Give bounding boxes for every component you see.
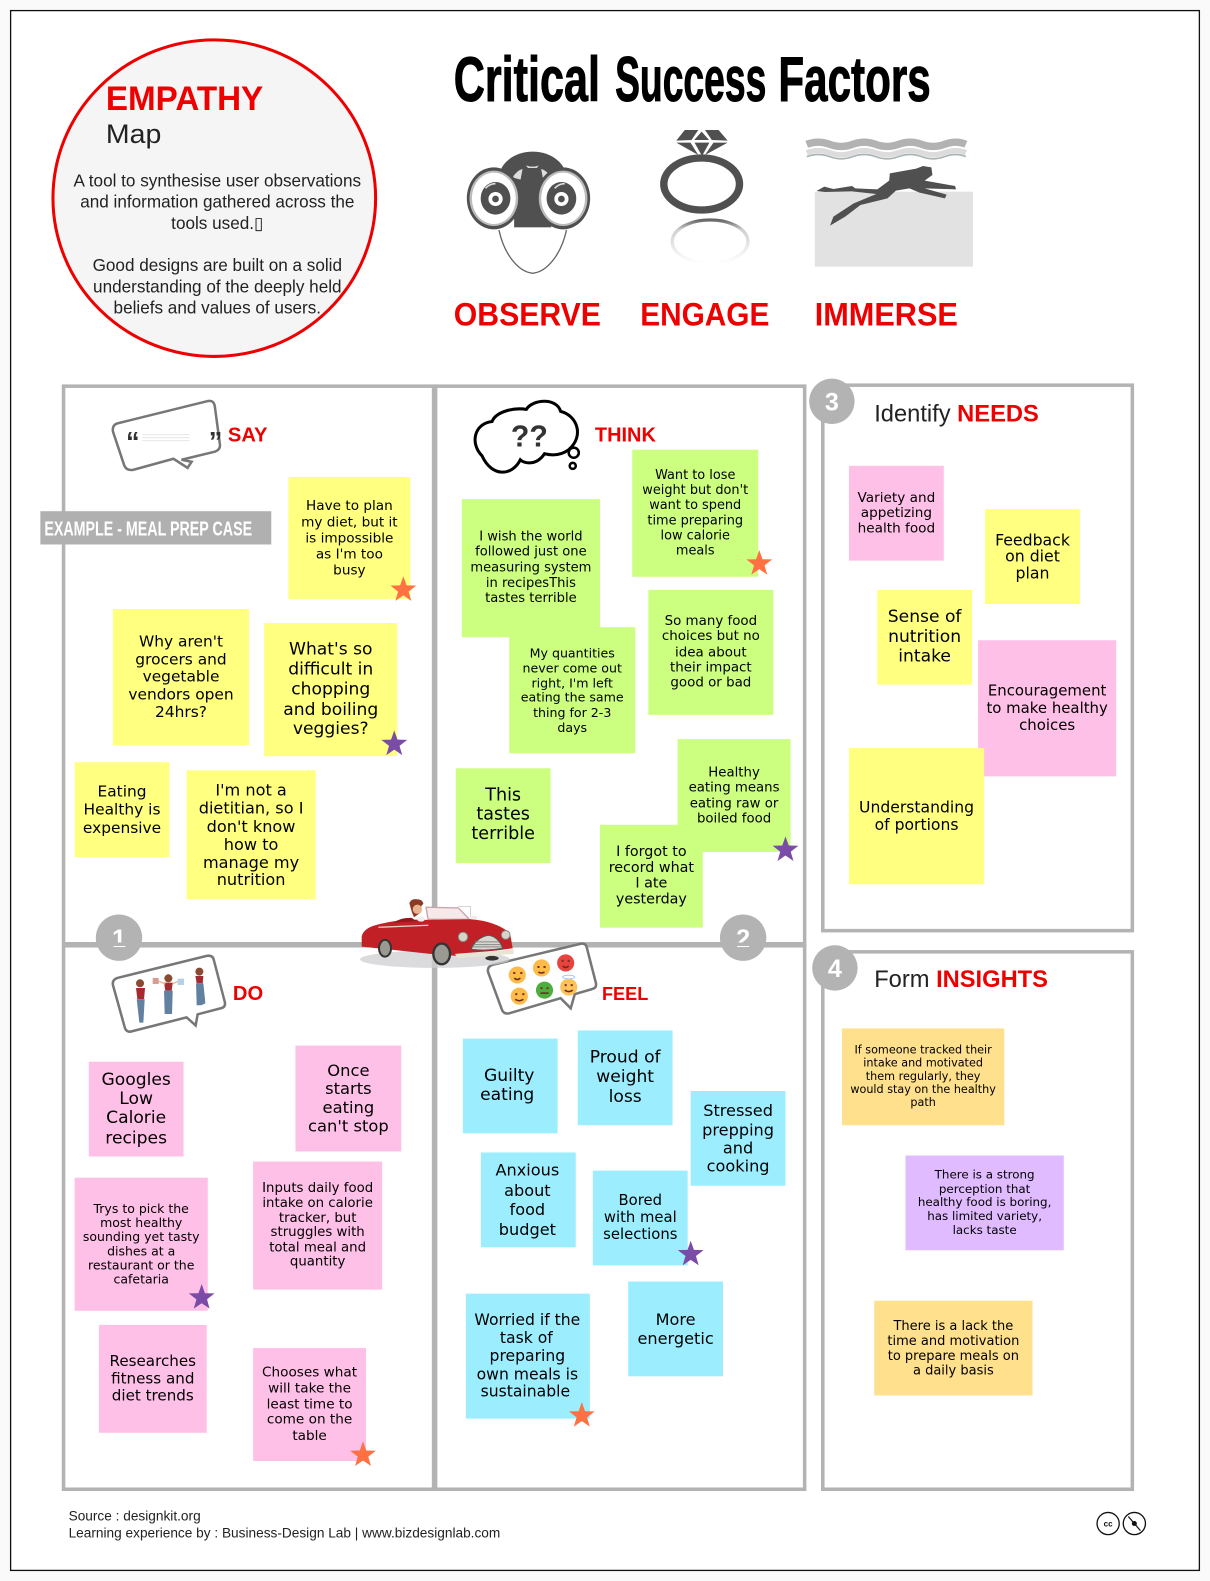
sticky: feedback on diet plan bbox=[985, 509, 1080, 604]
sticky: have to plan: as I'm too bbox=[316, 547, 383, 563]
sticky: have to plan: Have to plan bbox=[306, 498, 393, 514]
badge 1: 1 bbox=[112, 925, 126, 953]
sticky: insight tracked intake bbox=[842, 1028, 1004, 1125]
sticky: have to plan: is impossible bbox=[305, 530, 393, 546]
sticky: i wish the world bbox=[462, 499, 600, 637]
sticky: guilty eating: Guilty bbox=[484, 1066, 534, 1086]
sticky: my quantities: My quantities bbox=[530, 645, 615, 660]
sticky: eating healthy: Eating bbox=[98, 783, 147, 801]
icon: creative commons bbox=[1097, 1512, 1145, 1535]
star: purple bbox=[773, 836, 798, 861]
driver bbox=[409, 899, 423, 917]
sticky: anxious about food budget: budget bbox=[499, 1220, 556, 1239]
sticky: not a dietitian bbox=[187, 770, 316, 899]
sticky: encouragement bbox=[978, 640, 1116, 776]
sticky: not a dietitian: nutrition bbox=[217, 870, 285, 889]
heading: empathy: EMPATHY bbox=[106, 80, 263, 118]
sticky: more energetic: More bbox=[656, 1309, 696, 1328]
sticky: stressed prepping bbox=[691, 1091, 785, 1186]
sticky: anxious about food budget: food bbox=[510, 1199, 545, 1218]
icon: red convertible car with driver bbox=[360, 899, 514, 968]
intro text: Good designs are built on a solid bbox=[93, 255, 342, 275]
sticky: so many food choices: So many food bbox=[665, 614, 757, 629]
sticky: i forgot to record: yesterday bbox=[616, 891, 687, 907]
sticky: want to lose weight: Want to lose bbox=[655, 467, 735, 482]
label: observe: OBSERVE bbox=[454, 297, 601, 333]
star: purple bbox=[381, 731, 407, 755]
sticky: have to plan: busy bbox=[333, 563, 366, 579]
sticky: worried if the task: sustainable bbox=[481, 1382, 570, 1400]
sticky: bored with meal: selections bbox=[603, 1226, 677, 1243]
sticky: my quantities: thing for 2-3 bbox=[533, 704, 611, 719]
sticky: not a dietitian: how to bbox=[224, 834, 278, 853]
sticky: have to plan bbox=[288, 477, 410, 599]
sticky: insight healthy food boring: lacks taste bbox=[953, 1223, 1017, 1237]
sticky: why aren't grocers: vegetable bbox=[143, 668, 219, 686]
sticky: this tastes terrible: terrible bbox=[471, 824, 535, 844]
sticky: inputs daily food: tracker, but bbox=[279, 1211, 356, 1226]
sticky: sense of nutrition: intake bbox=[898, 646, 951, 666]
sticky: inputs daily food: struggles with bbox=[271, 1225, 365, 1240]
intro text: tools used.▯ bbox=[171, 213, 263, 233]
sticky: insight lack of time: time and motivation bbox=[887, 1334, 1019, 1349]
sticky: sense of nutrition bbox=[877, 590, 972, 685]
badge 2: 2 bbox=[736, 925, 750, 953]
sticky: so many food choices bbox=[648, 590, 773, 715]
sticky: worried if the task: preparing bbox=[490, 1347, 565, 1365]
sticky: sense of nutrition: nutrition bbox=[888, 627, 961, 647]
icon: binoculars bbox=[467, 152, 590, 273]
sticky: have to plan: my diet, but it bbox=[301, 514, 398, 530]
title: Success bbox=[615, 44, 766, 115]
sticky: insight healthy food boring: There is a strong bbox=[934, 1168, 1035, 1182]
sticky: eating healthy: Healthy is bbox=[84, 801, 160, 819]
sticky: googles low calorie: recipes bbox=[105, 1128, 167, 1148]
sticky: trys to pick: restaurant or the bbox=[88, 1257, 195, 1272]
sticky: encouragement: Encouragement bbox=[988, 682, 1107, 700]
sticky: chooses what bbox=[253, 1348, 366, 1461]
sticky: why aren't grocers bbox=[113, 609, 249, 745]
sticky: once starts eating bbox=[295, 1046, 401, 1151]
sticky: stressed prepping: cooking bbox=[707, 1156, 770, 1175]
sticky: i forgot to record: I ate bbox=[635, 875, 668, 891]
sticky: proud of weight loss: loss bbox=[609, 1087, 642, 1107]
badge 1 bbox=[96, 915, 142, 961]
sticky: i wish the world: measuring system bbox=[470, 560, 591, 575]
heading: form insights: Form INSIGHTS bbox=[874, 967, 1048, 993]
sticky: bored with meal: with meal bbox=[604, 1209, 677, 1226]
sticky: insight tracked intake: would stay on the healthy bbox=[850, 1082, 996, 1095]
sticky: not a dietitian: dietitian, so I bbox=[199, 798, 303, 817]
sticky: chooses what: least time to bbox=[267, 1397, 353, 1413]
sticky: i forgot to record bbox=[600, 825, 703, 928]
sticky: healthy eating means: eating means bbox=[689, 780, 780, 795]
star: orange bbox=[569, 1402, 595, 1427]
sticky: feedback on diet plan: Feedback bbox=[995, 530, 1071, 549]
icon: think cloud: ?? bbox=[511, 421, 548, 454]
badge 4 bbox=[812, 945, 858, 991]
title bbox=[454, 44, 931, 115]
sticky: more energetic bbox=[628, 1282, 723, 1376]
sticky: understanding of portions: Understanding bbox=[859, 799, 974, 817]
sticky: i wish the world: followed just one bbox=[475, 544, 587, 559]
sticky: my quantities: eating the same bbox=[521, 689, 624, 704]
sticky: eating healthy bbox=[75, 762, 169, 857]
sticky: insight tracked intake: intake and motivated bbox=[863, 1056, 983, 1069]
sticky: this tastes terrible bbox=[456, 768, 551, 863]
sticky: what's so difficult: and boiling bbox=[283, 700, 378, 720]
sticky: want to lose weight: low calorie bbox=[661, 528, 730, 543]
sticky: so many food choices: choices but no bbox=[662, 629, 760, 644]
icon: diamond ring bbox=[664, 130, 748, 263]
star: purple bbox=[678, 1241, 704, 1265]
sticky: researches fitness: fitness and bbox=[111, 1369, 194, 1387]
icon: think cloud bbox=[475, 401, 579, 472]
sticky: proud of weight loss: Proud of bbox=[590, 1048, 662, 1068]
sticky: chooses what: Chooses what bbox=[262, 1364, 358, 1380]
intro text: and information gathered across the bbox=[80, 192, 354, 212]
sticky: understanding of portions bbox=[849, 748, 984, 884]
icon: do speech bubble bbox=[113, 956, 225, 1032]
sticky: what's so difficult: chopping bbox=[291, 680, 370, 700]
sticky: so many food choices: good or bad bbox=[670, 675, 751, 690]
sticky: trys to pick: cafetaria bbox=[113, 1271, 169, 1286]
sticky: sense of nutrition: Sense of bbox=[888, 607, 962, 627]
sticky: once starts eating: Once bbox=[327, 1060, 370, 1079]
sticky: variety and appetizing: Variety and bbox=[858, 490, 935, 506]
sticky: stressed prepping: prepping bbox=[702, 1120, 774, 1139]
icon: say speech bubble bbox=[113, 401, 222, 470]
sticky: insight healthy food boring bbox=[905, 1156, 1064, 1250]
heading: map: Map bbox=[106, 118, 161, 149]
panel: identify needs bbox=[823, 385, 1132, 931]
sticky: anxious about food budget bbox=[481, 1152, 576, 1247]
sticky: not a dietitian: don't know bbox=[207, 816, 296, 835]
sticky: want to lose weight: weight but don't bbox=[642, 483, 748, 498]
heading: identify needs: Identify NEEDS bbox=[874, 401, 1039, 427]
sticky: googles low calorie: Calorie bbox=[106, 1108, 166, 1128]
heading: think: THINK bbox=[595, 425, 656, 447]
sticky: guilty eating bbox=[463, 1039, 558, 1133]
sticky: healthy eating means: boiled food bbox=[697, 811, 771, 826]
sticky: insight lack of time: There is a lack the bbox=[893, 1318, 1013, 1333]
heading: say: SAY bbox=[228, 425, 268, 447]
sticky: anxious about food budget: Anxious bbox=[495, 1160, 559, 1179]
sticky: this tastes terrible: tastes bbox=[476, 805, 530, 825]
sticky: variety and appetizing: appetizing bbox=[861, 505, 932, 521]
sticky: googles low calorie bbox=[89, 1062, 184, 1157]
sticky: chooses what: table bbox=[292, 1428, 327, 1444]
sticky: my quantities: never come out bbox=[523, 660, 622, 675]
sticky: insight lack of time bbox=[874, 1301, 1033, 1395]
sticky: inputs daily food: intake on calorie bbox=[262, 1195, 373, 1210]
panel: form insights bbox=[823, 952, 1132, 1489]
sticky: why aren't grocers: grocers and bbox=[135, 650, 227, 668]
figure: woman left bbox=[136, 979, 145, 1023]
sticky: once starts eating: can't stop bbox=[308, 1116, 389, 1135]
star: orange bbox=[350, 1441, 376, 1466]
sticky: feedback on diet plan: plan bbox=[1016, 563, 1049, 582]
title: Factors bbox=[778, 44, 931, 115]
sticky: insight tracked intake: path bbox=[910, 1096, 936, 1109]
sticky: researches fitness: diet trends bbox=[112, 1386, 194, 1404]
sticky: understanding of portions: of portions bbox=[875, 816, 959, 834]
sticky: insight healthy food boring: healthy food is boring, bbox=[918, 1195, 1051, 1209]
panel: do bbox=[64, 946, 434, 1489]
sticky: insight healthy food boring: has limited variety, bbox=[927, 1209, 1042, 1223]
sticky: i wish the world: tastes terrible bbox=[485, 590, 577, 605]
sticky: what's so difficult: difficult in bbox=[288, 660, 373, 680]
sticky: inputs daily food bbox=[253, 1162, 382, 1290]
sticky: what's so difficult: What's so bbox=[289, 639, 372, 659]
heading: feel: FEEL bbox=[602, 984, 648, 1004]
sticky: insight tracked intake: If someone tracked their bbox=[854, 1043, 992, 1056]
sticky: chooses what: come on the bbox=[267, 1412, 352, 1428]
intro text: beliefs and values of users. bbox=[114, 298, 321, 318]
panel: think bbox=[436, 386, 805, 944]
sticky: stressed prepping: and bbox=[723, 1138, 753, 1157]
sticky: stressed prepping: Stressed bbox=[703, 1101, 773, 1120]
sticky: chooses what: will take the bbox=[268, 1380, 351, 1396]
sticky: bored with meal bbox=[593, 1171, 688, 1265]
star: purple bbox=[189, 1284, 215, 1309]
footer source text: Source : designkit.org bbox=[69, 1509, 201, 1524]
sticky: googles low calorie: Googles bbox=[101, 1070, 171, 1090]
sticky: i wish the world: in recipesThis bbox=[486, 575, 576, 590]
sticky: worried if the task: own meals is bbox=[477, 1365, 578, 1383]
sticky: inputs daily food: total meal and bbox=[269, 1240, 366, 1255]
sticky: proud of weight loss bbox=[578, 1030, 673, 1125]
panel: feel bbox=[436, 946, 805, 1489]
sticky: trys to pick: dishes at a bbox=[107, 1243, 175, 1258]
sticky: why aren't grocers: 24hrs? bbox=[155, 703, 207, 721]
badge 3 bbox=[809, 379, 855, 424]
sticky: trys to pick: sounding yet tasty bbox=[83, 1229, 200, 1244]
example banner bbox=[40, 511, 271, 544]
sticky: what's so difficult: veggies? bbox=[293, 719, 369, 739]
sticky: my quantities: days bbox=[557, 719, 587, 734]
sticky: researches fitness: Researches bbox=[110, 1352, 196, 1370]
sticky: worried if the task: task of bbox=[500, 1329, 553, 1347]
example banner: EXAMPLE - MEAL PREP CASE bbox=[44, 518, 252, 540]
figures: three women bbox=[136, 968, 205, 1023]
sticky: eating healthy: expensive bbox=[83, 819, 161, 837]
sticky: proud of weight loss: weight bbox=[596, 1067, 654, 1087]
sticky: my quantities: right, I'm left bbox=[532, 675, 613, 690]
sticky: variety and appetizing: health food bbox=[858, 520, 935, 536]
sticky: insight tracked intake: them regularly, they bbox=[866, 1069, 981, 1082]
icon: feel emoji bubble bbox=[488, 944, 596, 1014]
sticky: worried if the task: Worried if the bbox=[474, 1311, 580, 1329]
figure: woman right bbox=[195, 968, 205, 1005]
sticky: encouragement: choices bbox=[1019, 716, 1075, 734]
sticky: worried if the task bbox=[466, 1294, 590, 1419]
sticky: googles low calorie: Low bbox=[119, 1089, 153, 1109]
icon: diver underwater bbox=[807, 142, 973, 267]
sticky: not a dietitian: I'm not a bbox=[215, 780, 287, 799]
label: immerse: IMMERSE bbox=[815, 297, 958, 333]
sticky: inputs daily food: quantity bbox=[290, 1254, 345, 1269]
sticky: trys to pick: Trys to pick the bbox=[93, 1200, 189, 1215]
sticky: not a dietitian: manage my bbox=[203, 853, 300, 872]
sticky: researches fitness bbox=[99, 1325, 207, 1433]
badge 3: 3 bbox=[825, 388, 839, 416]
sticky: i forgot to record: record what bbox=[609, 860, 694, 876]
sticky: more energetic: energetic bbox=[637, 1329, 714, 1348]
sticky: i wish the world: I wish the world bbox=[479, 529, 583, 544]
sticky: this tastes terrible: This bbox=[484, 786, 521, 806]
sticky: feedback on diet plan: on diet bbox=[1005, 546, 1060, 565]
footer source text: Learning experience by : Business-Design Lab | www.bizdesignlab.com bbox=[69, 1526, 500, 1541]
sticky: want to lose weight: want to spend bbox=[649, 498, 741, 513]
sticky: trys to pick: most healthy bbox=[100, 1215, 183, 1230]
figure: woman middle bbox=[153, 974, 184, 1014]
sticky: why aren't grocers: Why aren't bbox=[139, 632, 223, 650]
sticky: so many food choices: idea about bbox=[675, 645, 747, 660]
icon: say speech bubble: ” bbox=[209, 426, 222, 457]
sticky: trys to pick bbox=[75, 1178, 208, 1311]
sticky: want to lose weight bbox=[632, 450, 758, 577]
sticky: healthy eating means: eating raw or bbox=[690, 796, 779, 811]
sticky: i forgot to record: I forgot to bbox=[616, 844, 687, 860]
label: engage: ENGAGE bbox=[640, 297, 769, 333]
sticky: insight lack of time: to prepare meals on bbox=[888, 1349, 1019, 1364]
sticky: my quantities bbox=[509, 627, 635, 753]
icon: say speech bubble: “ bbox=[126, 426, 140, 457]
sticky: what's so difficult bbox=[264, 623, 397, 756]
sticky: variety and appetizing bbox=[849, 466, 944, 561]
icon: creative commons: cc bbox=[1104, 1520, 1113, 1529]
intro text: understanding of the deeply held bbox=[93, 276, 342, 296]
sticky: want to lose weight: time preparing bbox=[647, 513, 743, 528]
panel: empathy map intro circle bbox=[53, 40, 376, 356]
sticky: once starts eating: eating bbox=[323, 1098, 374, 1117]
sticky: want to lose weight: meals bbox=[676, 543, 715, 558]
sticky: healthy eating means: Healthy bbox=[708, 765, 760, 780]
sticky: once starts eating: starts bbox=[325, 1078, 372, 1097]
panel: say bbox=[64, 386, 434, 944]
star: orange bbox=[746, 550, 772, 575]
badge 4: 4 bbox=[828, 955, 842, 983]
sticky: guilty eating: eating bbox=[480, 1085, 534, 1105]
sticky: encouragement: to make healthy bbox=[986, 699, 1108, 717]
heading: do: DO bbox=[233, 983, 263, 1005]
sticky: so many food choices: their impact bbox=[670, 660, 752, 675]
badge 2 bbox=[720, 915, 766, 961]
sticky: inputs daily food: Inputs daily food bbox=[262, 1180, 373, 1195]
sticky: bored with meal: Bored bbox=[619, 1191, 662, 1208]
sticky: insight healthy food boring: perception that bbox=[939, 1182, 1031, 1196]
intro text: A tool to synthesise user observations bbox=[74, 171, 361, 191]
star: orange bbox=[390, 576, 416, 601]
sticky: insight lack of time: a daily basis bbox=[913, 1363, 994, 1378]
sticky: anxious about food budget: about bbox=[504, 1180, 551, 1199]
sticky: healthy eating means bbox=[678, 739, 791, 852]
title: Critical bbox=[454, 44, 600, 115]
sticky: why aren't grocers: vendors open bbox=[128, 686, 234, 704]
